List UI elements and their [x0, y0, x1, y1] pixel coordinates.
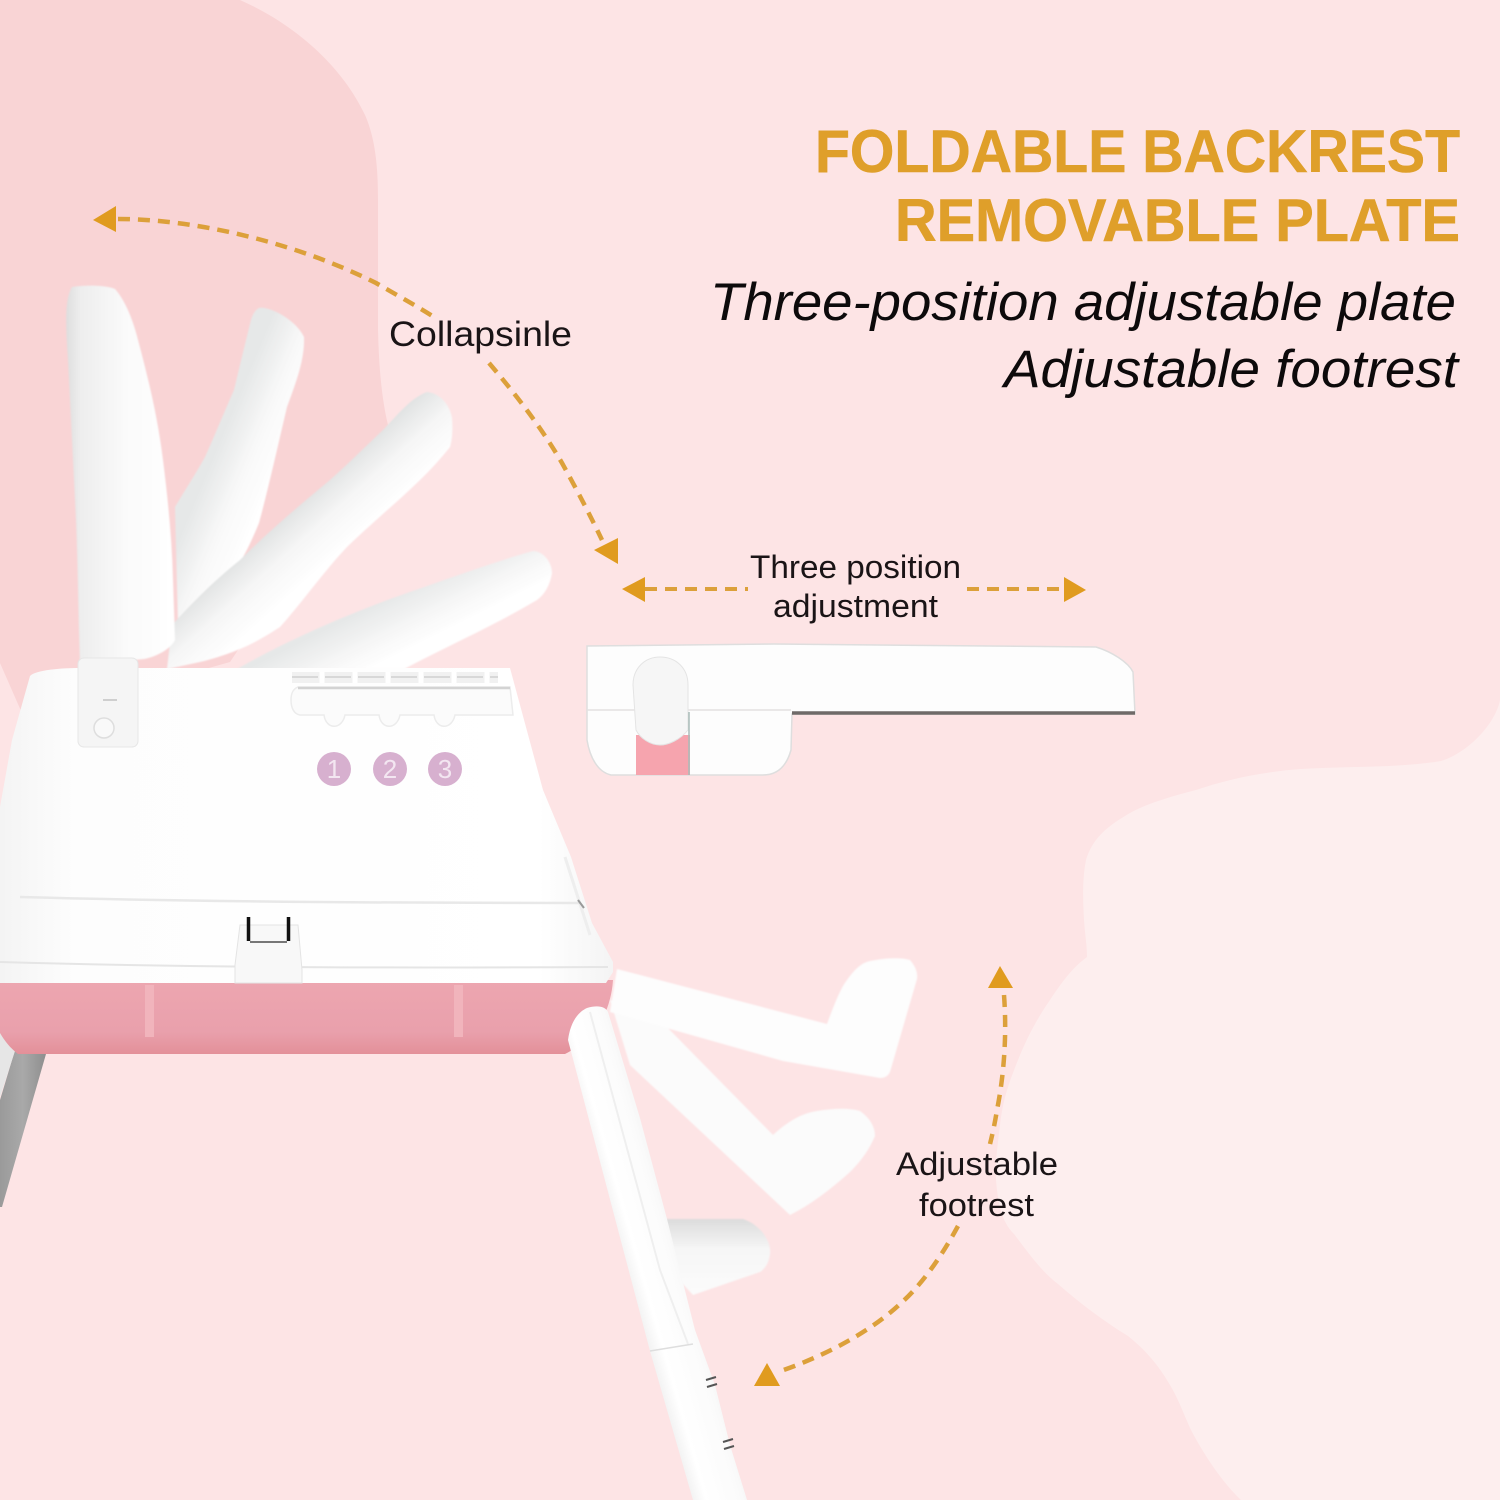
backrest: second position [175, 308, 304, 625]
arrow: footrest adjustment range [754, 966, 1013, 1386]
plate: pink slider [636, 735, 690, 775]
label: collapsible: Collapsinle [389, 315, 572, 354]
footrest: folded down [660, 1219, 770, 1295]
high chair backrest positions [66, 286, 552, 669]
label: adjustable footrest [896, 1146, 1058, 1223]
chair seat body [0, 658, 613, 1054]
background blob: pale pink right [996, 700, 1500, 1500]
label: adjustable footrest: footrest [919, 1187, 1034, 1223]
footrest: lower angled [610, 1000, 875, 1215]
plate: oval release button [633, 657, 688, 745]
front leg [568, 1006, 747, 1500]
seat: position markers 1 2 3: 1 [327, 754, 341, 784]
backrest: lowest position [237, 551, 552, 669]
subheading: Adjustable footrest [1001, 340, 1460, 399]
footrest positions [610, 958, 917, 1295]
seat: position markers 1 2 3: 2 [383, 754, 397, 784]
heading: REMOVABLE PLATE [895, 187, 1460, 254]
seat: position markers 1 2 3 [317, 752, 462, 786]
left steel leg [0, 1033, 46, 1207]
label: three position adjustment: Three position [750, 549, 961, 585]
seat: front clip [235, 917, 302, 983]
seat: position markers 1 2 3: 3 [438, 754, 452, 784]
footrest: raised [610, 958, 917, 1078]
label: adjustable footrest: Adjustable [896, 1146, 1058, 1182]
seat: ribs [145, 985, 463, 1037]
label: three position adjustment [750, 549, 961, 624]
arrow: plate position adjustment [622, 577, 1086, 602]
heading [815, 118, 1460, 254]
removable plate [587, 644, 1135, 775]
label: three position adjustment: adjustment [773, 588, 938, 624]
subheading [710, 273, 1460, 399]
arrow: backrest collapse range [93, 206, 618, 564]
seat: pink base [0, 980, 613, 1054]
subheading: Three-position adjustable plate [710, 273, 1456, 332]
backrest: third position [167, 392, 452, 669]
seat: hinge [78, 658, 138, 747]
seat: plate rail [291, 672, 513, 726]
background blob: dark pink top left [0, 0, 388, 720]
seat: white shell [0, 668, 613, 983]
heading: FOLDABLE BACKREST [815, 118, 1460, 185]
backrest: upright position [66, 286, 175, 665]
